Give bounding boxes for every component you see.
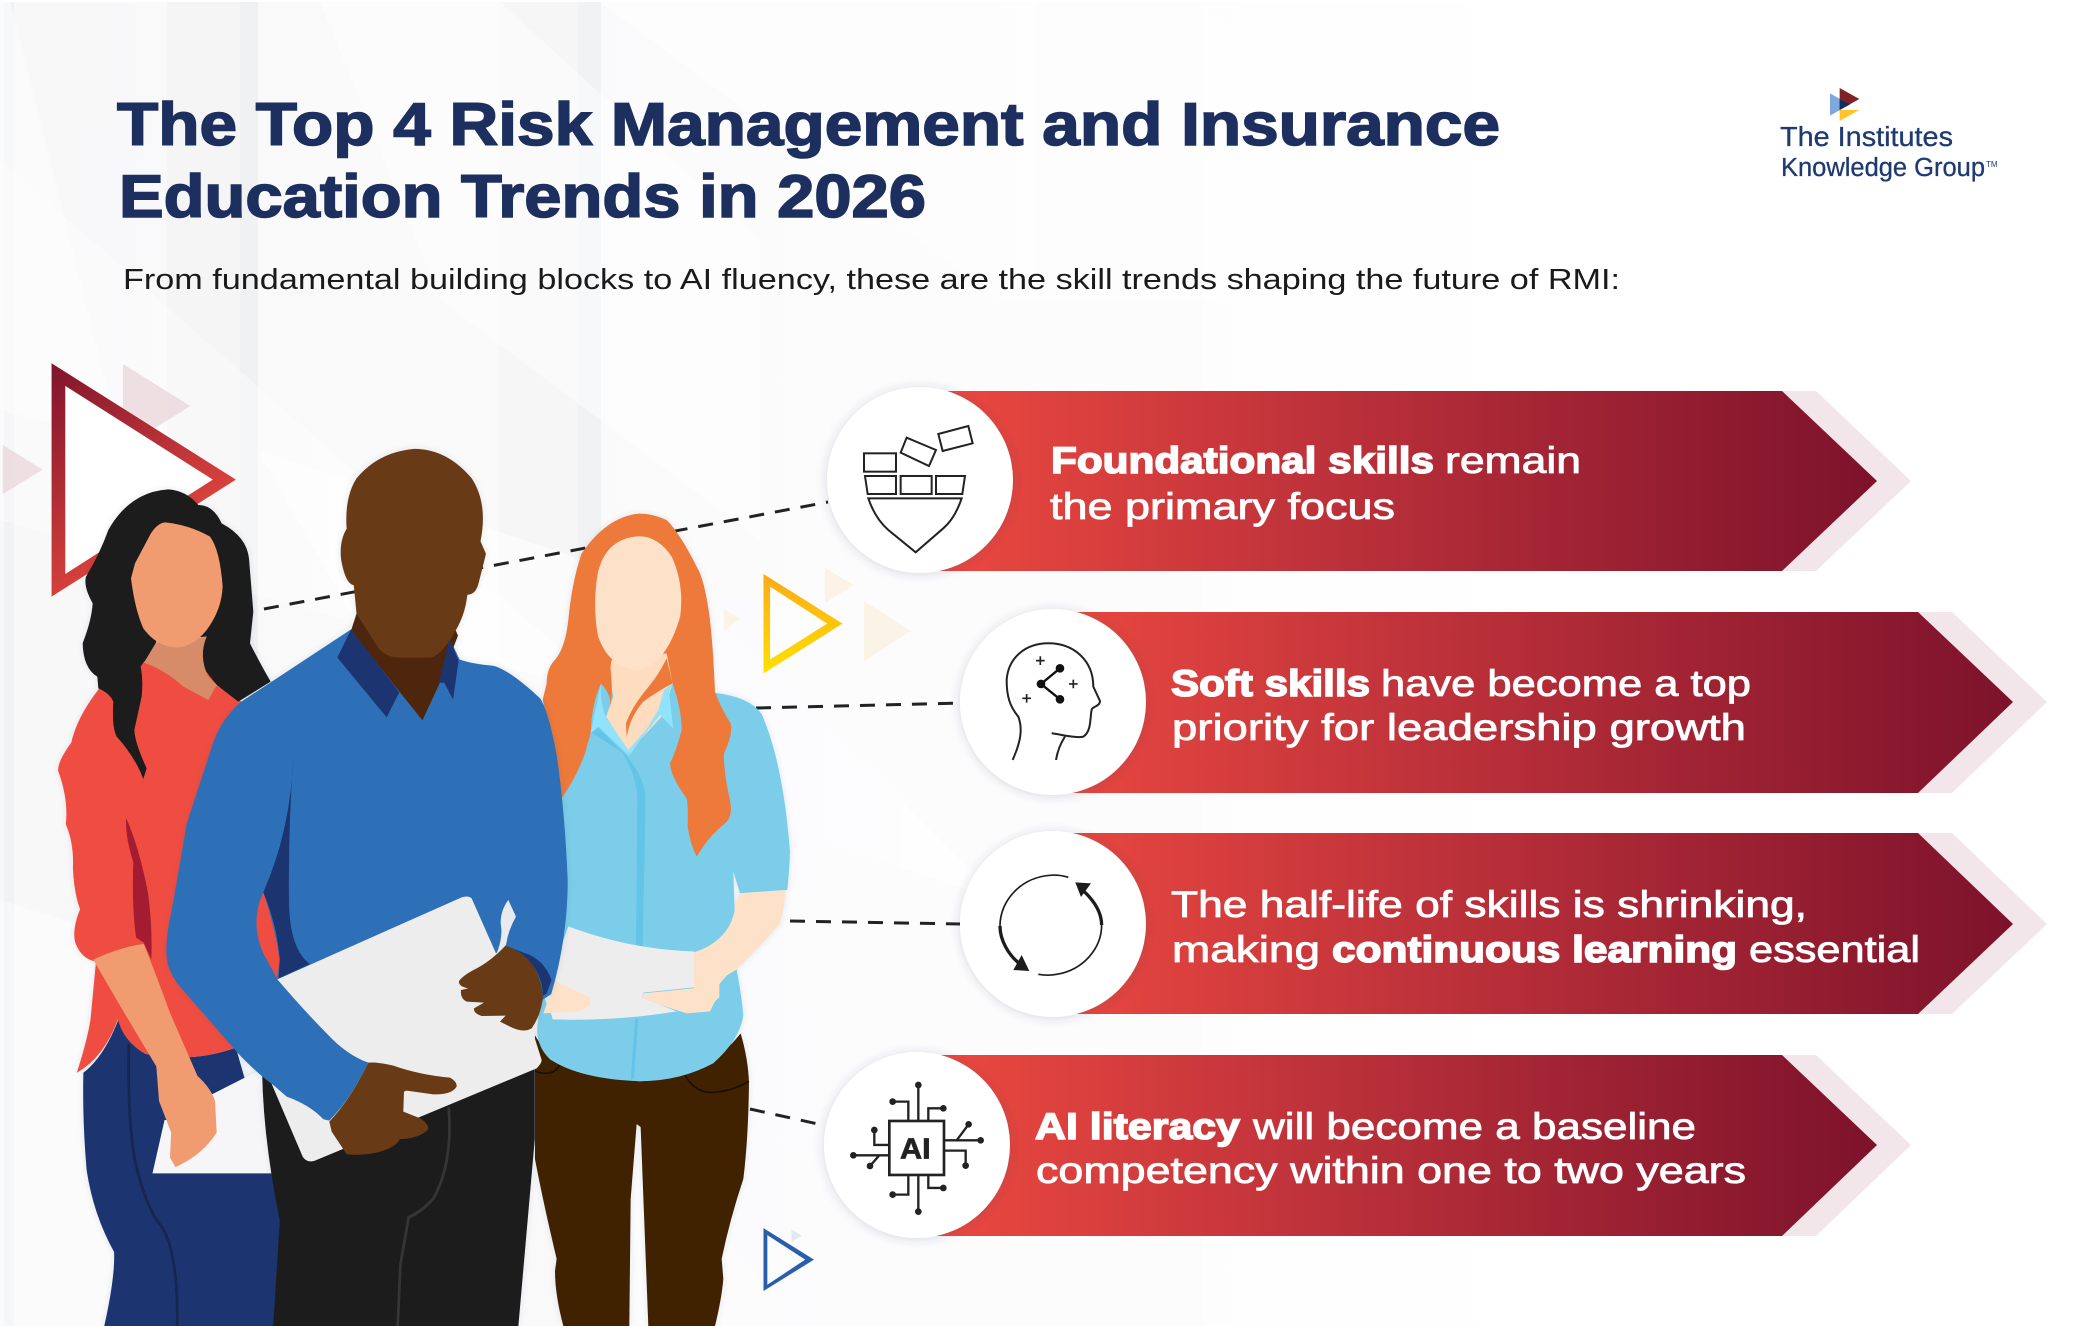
banner text: continuous learning <box>1332 929 1737 970</box>
circle with icon: bricks and shield <box>827 387 1013 573</box>
banner text: Soft skills <box>1171 663 1370 704</box>
banner 2: soft skills <box>960 609 2047 795</box>
banner 1: foundational skills <box>827 387 1911 573</box>
subtitle: From fundamental building blocks to AI fluency, these are the skill trends shaping the future of RMI: <box>123 264 1620 296</box>
people illustration <box>58 449 790 1326</box>
banner text: priority for leadership growth <box>1172 707 1746 748</box>
banner text: Foundational skills <box>1051 440 1434 481</box>
banner text <box>1171 884 1920 970</box>
banner text: have become a top <box>1381 663 1751 704</box>
banner text: AI literacy <box>1035 1106 1240 1147</box>
logo: The Institutes Knowledge Group: TM <box>1986 160 1998 169</box>
logo: The Institutes Knowledge Group: Knowledge Group <box>1781 154 1985 182</box>
banner text: making <box>1172 929 1320 970</box>
banner text: the primary focus <box>1050 486 1395 527</box>
banner text: The half-life of skills is shrinking, <box>1171 884 1807 925</box>
decorative triangles <box>3 363 853 1291</box>
person: left woman <box>58 489 285 1326</box>
circle with icon: head with network <box>960 609 1146 795</box>
logo: The Institutes Knowledge Group: The Institutes <box>1780 121 1953 152</box>
pale cream triangle <box>864 601 911 661</box>
banner text: remain <box>1445 440 1581 481</box>
person: right woman <box>535 514 790 1326</box>
banner text: competency within one to two years <box>1036 1150 1746 1191</box>
title: The Top 4 Risk Management and Insurance <box>117 91 1500 158</box>
title: Education Trends in 2026 <box>119 163 926 230</box>
banner text <box>1050 440 1581 527</box>
banner text: essential <box>1749 929 1920 970</box>
dashed connector lines <box>264 502 962 1124</box>
circle with icon: AI chip <box>824 1052 1010 1238</box>
banner 4: AI literacy <box>824 1052 1911 1238</box>
banner text <box>1035 1106 1746 1191</box>
circle with icon: cycle arrows <box>960 831 1146 1017</box>
person: center man <box>166 449 568 1326</box>
banner text <box>1171 663 1751 748</box>
banner 3: continuous learning <box>960 831 2047 1017</box>
circle with icon: AI chip: AI <box>900 1134 931 1166</box>
banner text: will become a baseline <box>1252 1106 1696 1147</box>
logo: The Institutes Knowledge Group <box>1780 88 1998 182</box>
title <box>117 91 1500 230</box>
